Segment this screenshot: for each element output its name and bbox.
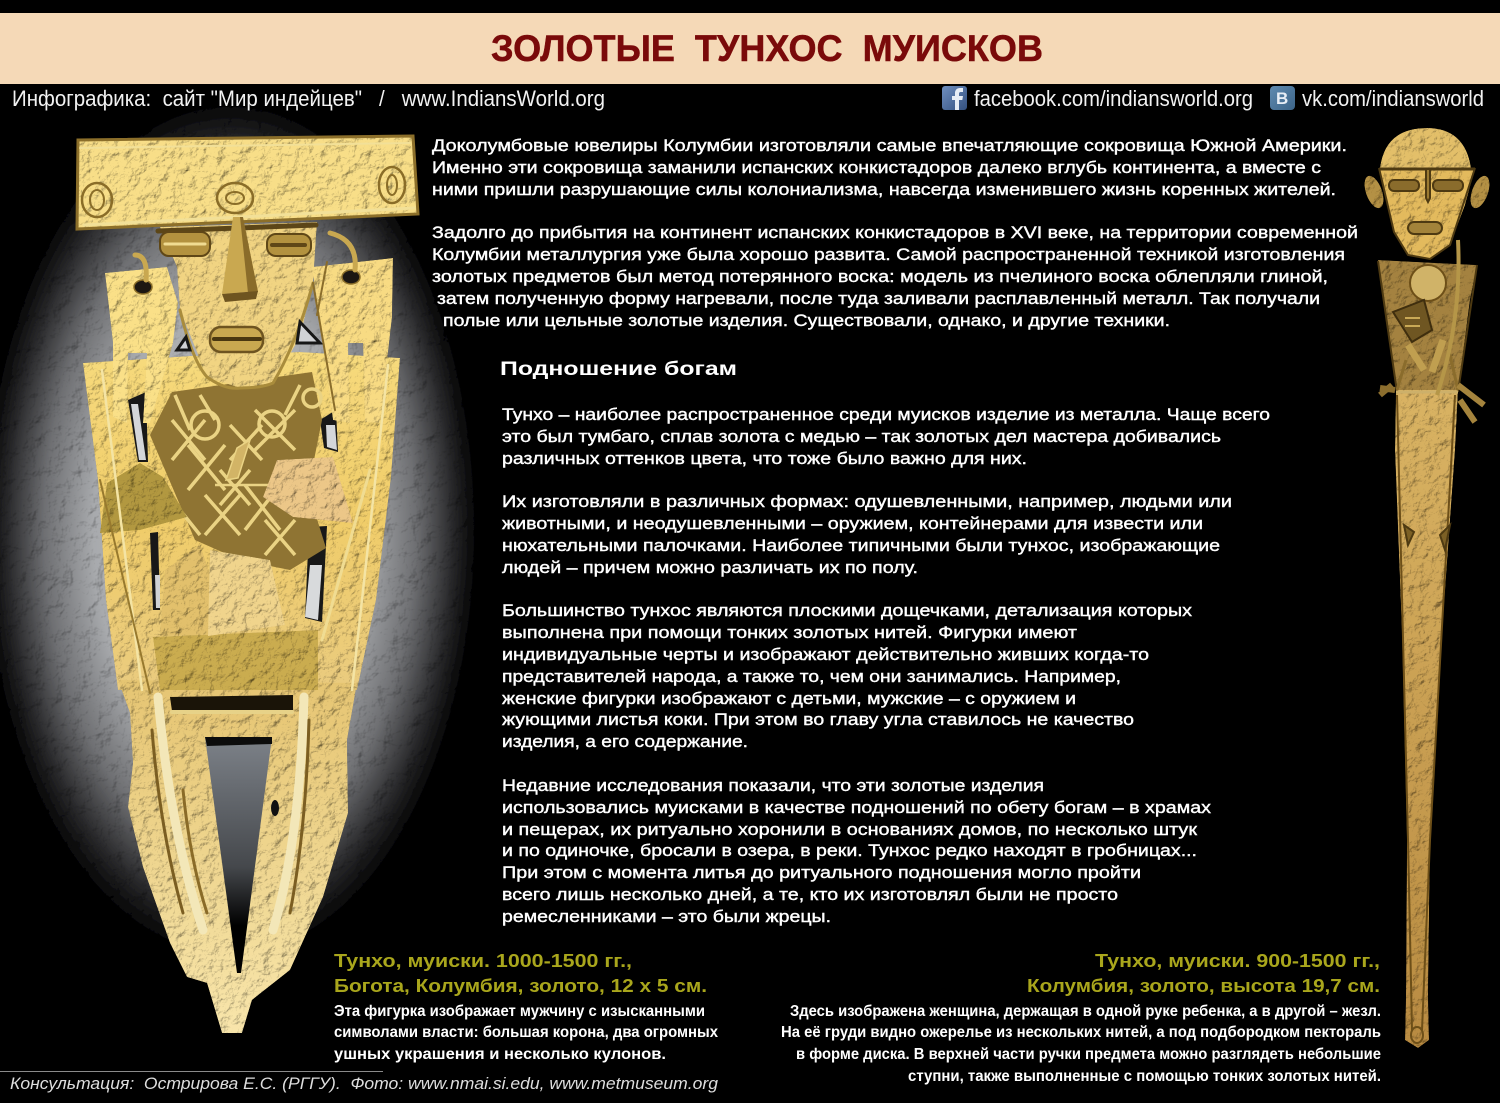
shaft [1395,390,1458,1048]
right caption: Колумбия, золото, высота 19,7 см. [1027,976,1380,996]
main article text: Их изготовляли в различных формах: одушевленными, например, людьми или [502,492,1232,511]
intro paragraphs: полые или цельные золотые изделия. Существовали, однако, и другие техники. [443,311,1170,330]
intro paragraphs: Именно эти сокровища заманили испанских конкистадоров далеко вглубь континента, а вместе с [432,158,1322,177]
waist band [153,630,318,690]
main article text: людей – причем можно различать их по полу. [502,558,918,577]
face [160,222,317,388]
main article text: и по одиночке, бросали в озера, в реки. Тунхос редко находят в гробницах... [502,841,1197,860]
main article text: Недавние исследования показали, что эти золотые изделия [502,776,1044,795]
left caption [334,951,718,1063]
left figure: gold tunjo of a man [77,136,418,1033]
right figure: gold tunjo of a woman with child and staff [1361,128,1493,1048]
main article text: это был тумбаго, сплав золота с медью – так золотых дел мастера добивались [502,427,1221,446]
crown [77,136,418,230]
right ear panel [312,258,393,423]
footer credits: Консультация: Острирова Е.С. (РГГУ). Фото: www.nmai.si.edu, www.metmuseum.org [10,1074,719,1093]
head dome [1380,128,1471,168]
intro paragraphs: золотых предметов был метод потерянного воска: модель из пчелиного воска облепляли глиной, [432,267,1328,286]
intro paragraphs: Задолго до прибытия на континент испанских конкистадоров в XVI веке, на территории современной [432,223,1358,242]
intro paragraphs: ними пришли разрушающие силы колониализма, навсегда изменившего жизнь коренных жителей. [432,180,1336,199]
belly [208,550,285,636]
credit line: Инфографика: сайт "Мир индейцев" / www.IndiansWorld.org [12,86,605,111]
leg ridges [152,697,309,930]
main article text: ремесленниками – это были жрецы. [502,907,831,926]
main article text: При этом с момента литья до ритуального подношения могло пройти [502,863,1141,882]
facebook address: facebook.com/indiansworld.org [974,86,1253,111]
open-work holes showing background [128,392,338,973]
right caption: ступни, также выполненные с помощью тонких золотых нитей. [908,1068,1381,1085]
title band [0,13,1500,84]
left ear panel [105,267,178,423]
left caption: ушных украшения и несколько кулонов. [334,1046,666,1063]
intro paragraphs: Доколумбовые ювелиры Колумбии изготовляли самые впечатляющие сокровища Южной Америки. [432,136,1347,155]
main article text: жующими листья коки. При этом во главу угла ставилось не качество [502,710,1134,729]
main article text: нюхательными палочками. Наиболее типичными были тунхос, изображающие [502,536,1220,555]
left caption: Эта фигурка изображает мужчину с изысканными [334,1003,705,1020]
ornaments, face and panels [77,136,418,690]
left caption: Тунхо, муиски. 1000-1500 гг., [334,951,632,971]
body back plates and legs [83,352,400,1033]
section heading: Подношение богам [500,359,737,380]
main article text: всего лишь несколько дней, а те, кто их изготовлял были не просто [502,885,1118,904]
intro paragraphs: затем полученную форму нагревали, после туда заливали расплавленный металл. Так получали [437,289,1320,308]
main article text: Тунхо – наиболее распространенное среди муисков изделие из металла. Чаще всего [502,405,1270,424]
icon: vk [1270,86,1295,110]
left shield [100,463,187,533]
main article text: животными, и неодушевленными – оружием, контейнерами для извести или [502,514,1203,533]
main article text: Большинство тунхос являются плоскими дощечками, детализация которых [502,601,1193,620]
main article text: и пещерах, их ритуально хоронили в основаниях домов, по несколько штук [502,820,1198,839]
main article text: использовались муисками в качестве подношений по обету богам – в храмах [502,798,1212,817]
right caption: в форме диска. В верхней части ручки предмета можно разглядеть небольшие [796,1046,1381,1063]
right caption: На её груди видно ожерелье из нескольких нитей, а под подбородком пектораль [781,1024,1381,1041]
right caption [781,951,1381,1085]
icon: facebook [942,86,967,110]
main article text: индивидуальные черты и изображают действительно живших когда-то [502,645,1149,664]
vk address: vk.com/indiansworld [1302,86,1484,111]
icon: vk: В [1276,89,1288,108]
intro paragraphs [432,136,1358,330]
footer rule [0,1071,383,1072]
title: ЗОЛОТЫЕ ТУНХОС МУИСКОВ [491,28,1043,69]
intro paragraphs: Колумбии металлургия уже была хорошо развита. Самой распространенной техникой изготовления [432,245,1345,264]
left ear [1361,173,1387,211]
social links [942,86,1484,111]
main article text: выполнена при помощи тонких золотых нитей. Фигурки имеют [502,623,1077,642]
main article text: женские фигурки изображают с детьми, мужские – с оружием и [502,689,1076,708]
main article text [502,405,1270,926]
right ear [1467,173,1493,211]
main article text: изделия, а его содержание. [502,732,748,751]
right caption: Тунхо, муиски. 900-1500 гг., [1095,951,1380,971]
main article text: представителей народа, а также то, чем они занимались. Например, [502,667,1121,686]
spotlight glow behind left figure [0,100,478,960]
figure details [1378,168,1484,1043]
right caption: Здесь изображена женщина, держащая в одной руке ребенка, а в другой – жезл. [790,1003,1381,1020]
chest lattice [150,372,326,570]
main article text: различных оттенков цвета, что тоже было важно для них. [502,449,1027,468]
torso [1378,260,1477,392]
crown and facial features [77,136,418,693]
face [1379,168,1475,259]
lower arm left [160,545,215,636]
right chest shield [263,457,353,523]
left caption: символами власти: большая корона, два огромных [334,1024,718,1041]
left caption: Богота, Колумбия, золото, 12 х 5 см. [334,976,707,996]
